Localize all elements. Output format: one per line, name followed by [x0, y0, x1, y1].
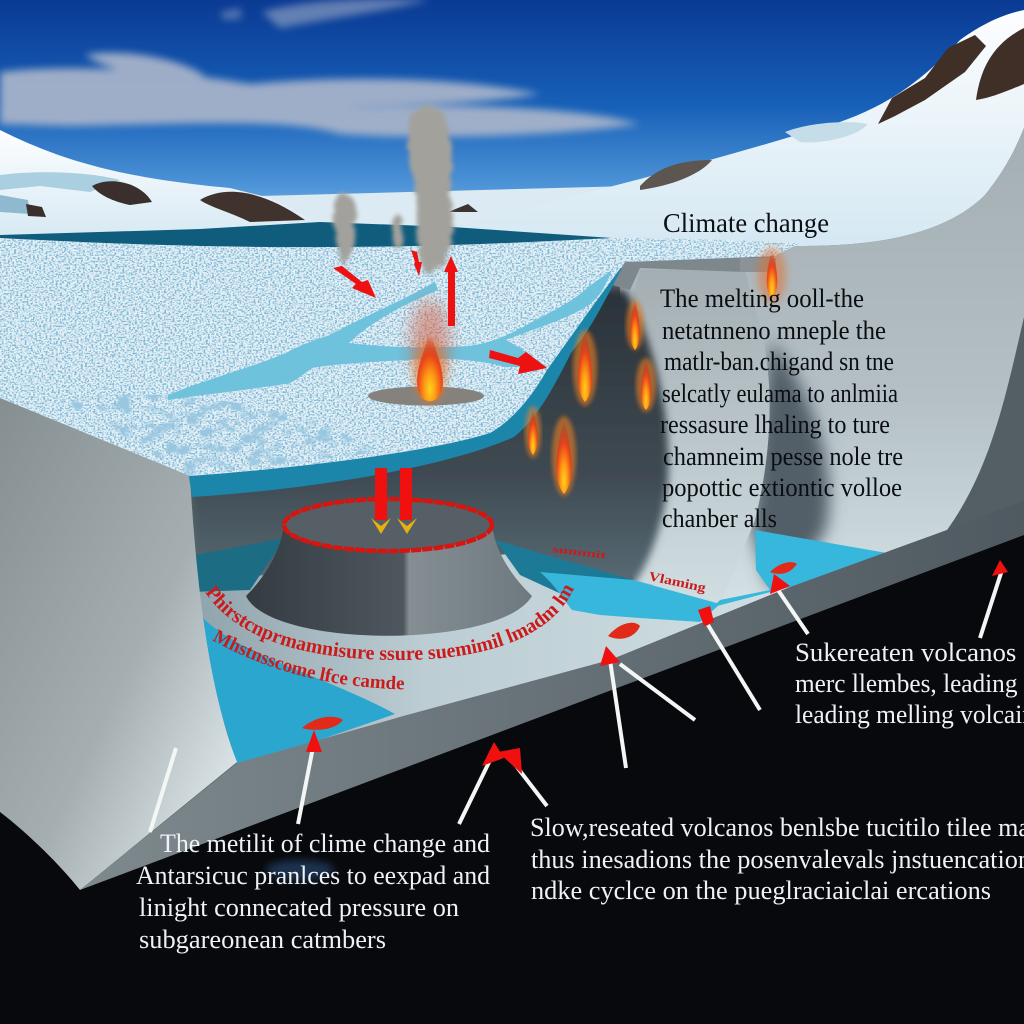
- text block: melting explanation: matlr-ban.chigand sn tne: [664, 347, 894, 376]
- scene base: [0, 255, 1024, 895]
- text block: lower middle caption: ndke cyclce on the pueglraciaiclai ercations: [531, 876, 991, 905]
- vent hole: [368, 386, 484, 406]
- pressure arrows into crater: [371, 468, 417, 534]
- distant ice shelf: [260, 186, 640, 240]
- text block: lower left caption: [136, 829, 490, 954]
- right wall base: [560, 128, 1024, 660]
- glare on sea: [266, 860, 334, 880]
- upper lip of wall: [612, 256, 775, 290]
- light central panel: [600, 268, 770, 602]
- vent flame: [410, 300, 450, 404]
- text block: melting explanation: netatnneno mneple the: [662, 316, 886, 345]
- white pointer arrows: [150, 570, 1002, 832]
- rubble ice surface: [0, 238, 800, 476]
- text block: lower left caption: The metilit of clime change and: [160, 829, 490, 858]
- text block: melting explanation: ressasure lhaling to ture: [660, 410, 890, 439]
- left pool: [190, 612, 395, 768]
- left snow hill: [0, 130, 320, 260]
- red melt spots: [302, 562, 797, 730]
- red labels on floor: Mhstnsscome lfce camde: [212, 629, 404, 690]
- back wall: [190, 290, 668, 600]
- text block: melting explanation: popottic extiontic volloe: [662, 473, 902, 502]
- text block: right caption: [795, 638, 1024, 729]
- dark teal right of volcano: [495, 540, 660, 598]
- right pool rear: [700, 530, 887, 620]
- volcano: [246, 499, 532, 636]
- sky: [0, 0, 1024, 235]
- distant rocks: [448, 204, 478, 212]
- falling magma drops: [525, 247, 786, 496]
- right shadow band: [752, 340, 829, 590]
- text block: lower left caption: Antarsicuc pranlces to eexpad and: [136, 861, 490, 890]
- text block: lower middle caption: Slow,reseated volcanos benlsbe tucitilo tilee ma: [530, 813, 1024, 842]
- crater: [284, 499, 492, 551]
- crater red ring: [284, 499, 492, 551]
- text block: melting explanation: selcatly eulama to anlmiia: [662, 379, 898, 408]
- ice shelf underside band: [188, 268, 622, 497]
- red arrow heads: [306, 560, 1008, 774]
- front edge block: [80, 500, 1024, 890]
- far water: [0, 222, 612, 260]
- text block: lower middle caption: thus inesadions the posenvalevals jnstuencation: [531, 845, 1024, 874]
- black sea: [0, 535, 1024, 1024]
- dark teal by back wall: [190, 538, 285, 592]
- right snow hill: [452, 10, 1024, 280]
- red labels on floor: summit: [552, 544, 608, 562]
- rubble large chunks: [60, 394, 380, 476]
- right light wall: [620, 128, 1024, 620]
- meltwater stream: [168, 270, 612, 400]
- right pool front: [540, 572, 720, 622]
- text block: melting explanation: chanber alls: [662, 504, 777, 533]
- left wall: [0, 398, 237, 890]
- red labels on floor: [205, 544, 748, 720]
- clouds: [0, 0, 640, 137]
- title: climate change: Climate change: [663, 208, 829, 238]
- text block: melting explanation: [660, 284, 903, 533]
- text block: right caption: Sukereaten volcanos e: [795, 638, 1024, 667]
- smoke plumes: [332, 107, 452, 276]
- text block: lower left caption: subgareonean catmbers: [139, 925, 386, 954]
- cavity floor: [185, 553, 790, 770]
- red labels on floor: Vlaming: [647, 568, 708, 595]
- text block: lower middle caption: [530, 813, 1024, 905]
- text block: lower left caption: linight connecated pressure on: [139, 893, 459, 922]
- text block: melting explanation: chamneim pesse nole tre: [663, 442, 903, 471]
- text block: melting explanation: The melting ooll-the: [660, 284, 864, 313]
- upper lip notch: [740, 258, 776, 272]
- red arrows on ice: [333, 250, 547, 374]
